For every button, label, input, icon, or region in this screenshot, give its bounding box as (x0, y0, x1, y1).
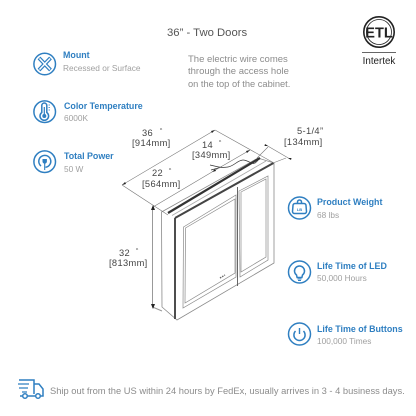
dimension: 36: [914mm] (132, 138, 171, 148)
icon: tools (34, 53, 56, 75)
spec: mount: Recessed or Surface (63, 63, 141, 73)
icon: weight LB: LB (297, 207, 302, 212)
touch switch (220, 275, 225, 278)
dimension: 14: “ (219, 140, 222, 147)
dimension: 36: 36 (142, 128, 153, 138)
spec: life time of LED (288, 261, 387, 283)
dimension: 22: [564mm] (142, 179, 181, 189)
dimension drawing: medicine cabinet (109, 126, 323, 320)
dimension: 32: [813mm] (109, 258, 148, 268)
right door mirror frame (239, 176, 268, 277)
icon: delivery truck (18, 380, 43, 398)
spec: total power: Total Power (64, 151, 114, 161)
spec: total power: 50 W (64, 164, 84, 174)
dimension: 32: “ (136, 248, 139, 255)
spec: product weight (288, 197, 382, 220)
icon: plug (34, 151, 56, 172)
title: 36” - Two Doors (167, 27, 248, 39)
cabinet body (162, 158, 274, 320)
shipping note: Ship out from the US within 24 hours by FedEx, usually arrives in 3 - 4 business days. (50, 386, 405, 396)
spec: life time of LED: Life Time of LED (317, 261, 387, 271)
spec: life time of LED: 50,000 Hours (317, 273, 367, 283)
spec: color temperature: 6000K (64, 113, 88, 123)
dimension: 22: 22 (152, 168, 163, 178)
icon: thermometer (34, 101, 56, 122)
certification: ETL Intertek: Intertek (363, 56, 395, 67)
spec: mount: Mount (63, 50, 90, 60)
left door mirror frame (183, 195, 236, 308)
certification: ETL Intertek: ETL (365, 26, 393, 42)
certification: ETL Intertek (362, 17, 396, 67)
dimension: 32: 32 (119, 248, 130, 258)
spec: color temperature: Color Temperature (64, 101, 143, 111)
spec: product weight: 68 lbs (317, 210, 339, 220)
spec: mount (34, 50, 141, 75)
spec: color temperature (34, 101, 143, 123)
spec: life time of buttons: 100,000 Times (317, 336, 371, 346)
spec: life time of buttons: Life Time of Buttons (317, 324, 403, 334)
dimension: 5-1/4: [134mm] (284, 137, 323, 147)
dimension: 36: “ (160, 128, 163, 135)
note: electric wire: on the top of the cabinet. (188, 79, 290, 89)
dimension: 14: [349mm] (192, 150, 231, 160)
dimension: 5-1/4: 5-1/4” (297, 126, 323, 136)
note: electric wire: The electric wire comes (188, 54, 288, 65)
wire (210, 158, 260, 170)
icon: power button (288, 323, 310, 345)
shipping note (18, 380, 405, 398)
note: electric wire: through the access hole (188, 66, 289, 77)
dimension: 14: 14 (202, 140, 213, 150)
note: electric wire (188, 54, 290, 89)
spec: product weight: Product Weight (317, 197, 382, 207)
dimension: 22: “ (169, 168, 172, 175)
icon: light bulb (288, 261, 310, 283)
spec: life time of buttons (288, 323, 403, 346)
dimension lines (122, 130, 292, 311)
spec: total power (34, 151, 114, 174)
